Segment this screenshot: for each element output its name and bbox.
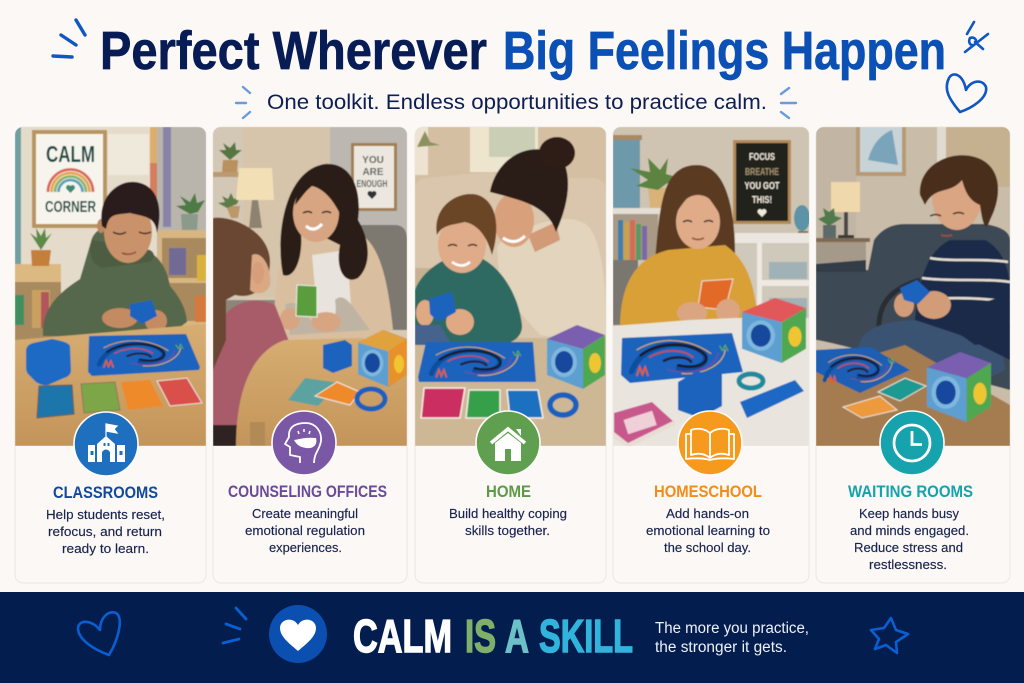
poster: you are enough: [351, 143, 397, 211]
heading: counseling offices: COUNSELING OFFICES: [228, 483, 387, 501]
table: [236, 338, 407, 446]
panel: homeschool: [613, 127, 810, 583]
text: counseling description: experiences.: [269, 540, 342, 555]
subtitle: One toolkit. Endless opportunities to practice calm.: [267, 91, 767, 114]
text: homeschool description: Add hands-on: [666, 506, 749, 521]
maze board: [816, 347, 910, 393]
maze board: [418, 342, 536, 382]
heading: homeschool: HOMESCHOOL: [654, 483, 762, 501]
card background: [415, 127, 606, 583]
cards: [421, 388, 465, 418]
lamp: [236, 168, 274, 200]
icon: heart badge: [269, 605, 327, 663]
armchair: [816, 224, 1010, 390]
tagline: [655, 620, 809, 656]
tagline: the stronger it gets.: [655, 639, 787, 656]
title: [100, 21, 946, 81]
text: counseling description: Create meaningful: [252, 506, 358, 521]
boy figure: [415, 194, 522, 345]
fidget bar: [740, 380, 804, 418]
woman figure: [490, 137, 606, 340]
boy figure: [43, 182, 187, 338]
icon: footer outline heart: [78, 612, 120, 655]
icon: hand drawn heart top right: [947, 74, 986, 112]
text: waiting rooms description: Reduce stress and: [854, 540, 963, 555]
boy figure: [858, 155, 1010, 400]
slogan: calm is a skill: [353, 610, 633, 662]
text: counseling description: emotional regulation: [245, 523, 365, 538]
slogan: calm is a skill: IS: [465, 610, 496, 662]
woman figure: [274, 164, 393, 340]
photo: counselor with child: [213, 127, 407, 446]
poster: calm corner: [45, 141, 96, 216]
book: [614, 402, 675, 445]
letter board: focus breathe: YOU GOT: [744, 180, 780, 192]
table: [613, 318, 809, 446]
box cube: [547, 325, 605, 389]
text: waiting rooms description: [850, 506, 969, 572]
box cube: [927, 352, 991, 422]
icon: head with brain: [272, 411, 336, 475]
box cube: [358, 330, 407, 387]
text: counseling description: [245, 506, 365, 555]
cards: [878, 378, 926, 401]
text: waiting rooms description: restlessness.: [869, 557, 947, 572]
card background: [213, 127, 407, 583]
text: waiting rooms description: Keep hands busy: [859, 506, 959, 521]
slogan: calm is a skill: A: [505, 610, 529, 662]
poster: calm corner: CALM: [46, 141, 95, 167]
photo: girl reading a card: [613, 127, 810, 448]
letter board: focus breathe: FOCUS: [749, 151, 775, 163]
text: homeschool description: [646, 506, 770, 555]
fidget cube: [26, 339, 71, 385]
text: homeschool description: the school day.: [664, 540, 751, 555]
title: Perfect Wherever: [100, 21, 487, 81]
icon: open book: [678, 411, 742, 475]
sofa: [415, 172, 606, 350]
icon: house: [476, 411, 540, 475]
icon: clock: [880, 411, 944, 475]
card background: [15, 127, 206, 583]
text: classrooms description: [46, 507, 165, 556]
text: home description: [449, 506, 567, 538]
icon: school: [74, 412, 138, 476]
text: home description: Build healthy coping: [449, 506, 567, 521]
cards: [37, 385, 74, 418]
girl figure: [620, 165, 758, 340]
poster: you are enough: YOU: [362, 155, 384, 166]
panel: home: [415, 127, 606, 583]
icon: footer star: [871, 618, 908, 653]
ring: [550, 395, 576, 415]
girl figure: [213, 217, 289, 446]
icon: title left rays: [53, 20, 85, 57]
header: [53, 20, 988, 118]
footer banner: [0, 592, 1024, 683]
heading: home: HOME: [486, 483, 531, 501]
text: home description: skills together.: [465, 523, 550, 538]
text: classrooms description: ready to learn.: [62, 541, 149, 556]
panel: waiting rooms: [816, 127, 1010, 583]
framed picture: [856, 127, 906, 176]
letter board: focus breathe: THIS!: [752, 194, 772, 206]
poster: calm corner: CORNER: [45, 199, 96, 216]
card background: [613, 127, 809, 583]
slogan: calm is a skill: CALM: [353, 610, 452, 662]
ring: [739, 374, 763, 388]
heading: classrooms: CLASSROOMS: [53, 484, 158, 502]
lamp: [831, 182, 860, 212]
letter board: focus breathe: [733, 140, 791, 224]
poster: you are enough: ENOUGH: [356, 179, 388, 190]
icon: footer rays: [223, 608, 246, 643]
text: homeschool description: emotional learning to: [646, 523, 770, 538]
box cube: [742, 298, 806, 363]
white shelving: [735, 233, 809, 243]
text: classrooms description: refocus, and return: [48, 524, 162, 539]
text: waiting rooms description: and minds engaged.: [850, 523, 969, 538]
slogan: calm is a skill: SKILL: [539, 610, 633, 662]
heading: waiting rooms: WAITING ROOMS: [848, 483, 973, 501]
fidget cube: [323, 340, 352, 373]
maze board: [88, 334, 200, 376]
text: classrooms description: Help students reset,: [46, 507, 165, 522]
table: [816, 345, 1010, 446]
title: Big Feelings Happen: [503, 21, 946, 81]
icon: subtitle rays: [236, 87, 796, 118]
ring: [357, 389, 385, 409]
fidget cube: [678, 372, 722, 418]
photo: boy in calm corner: [15, 127, 206, 446]
tagline: The more you practice,: [655, 620, 809, 637]
card background: [816, 127, 1010, 583]
photo: boy in waiting room: [816, 127, 1010, 446]
maze board: [621, 333, 743, 383]
panel: classrooms: [15, 127, 206, 583]
letter board: focus breathe: BREATHE: [745, 166, 779, 178]
photo: parent and child on the floor: [415, 127, 606, 446]
icon: title right sparkle: [965, 22, 988, 52]
cards: [288, 378, 340, 406]
poster: you are enough: ARE: [362, 167, 384, 178]
panel: counseling offices: [213, 127, 407, 583]
